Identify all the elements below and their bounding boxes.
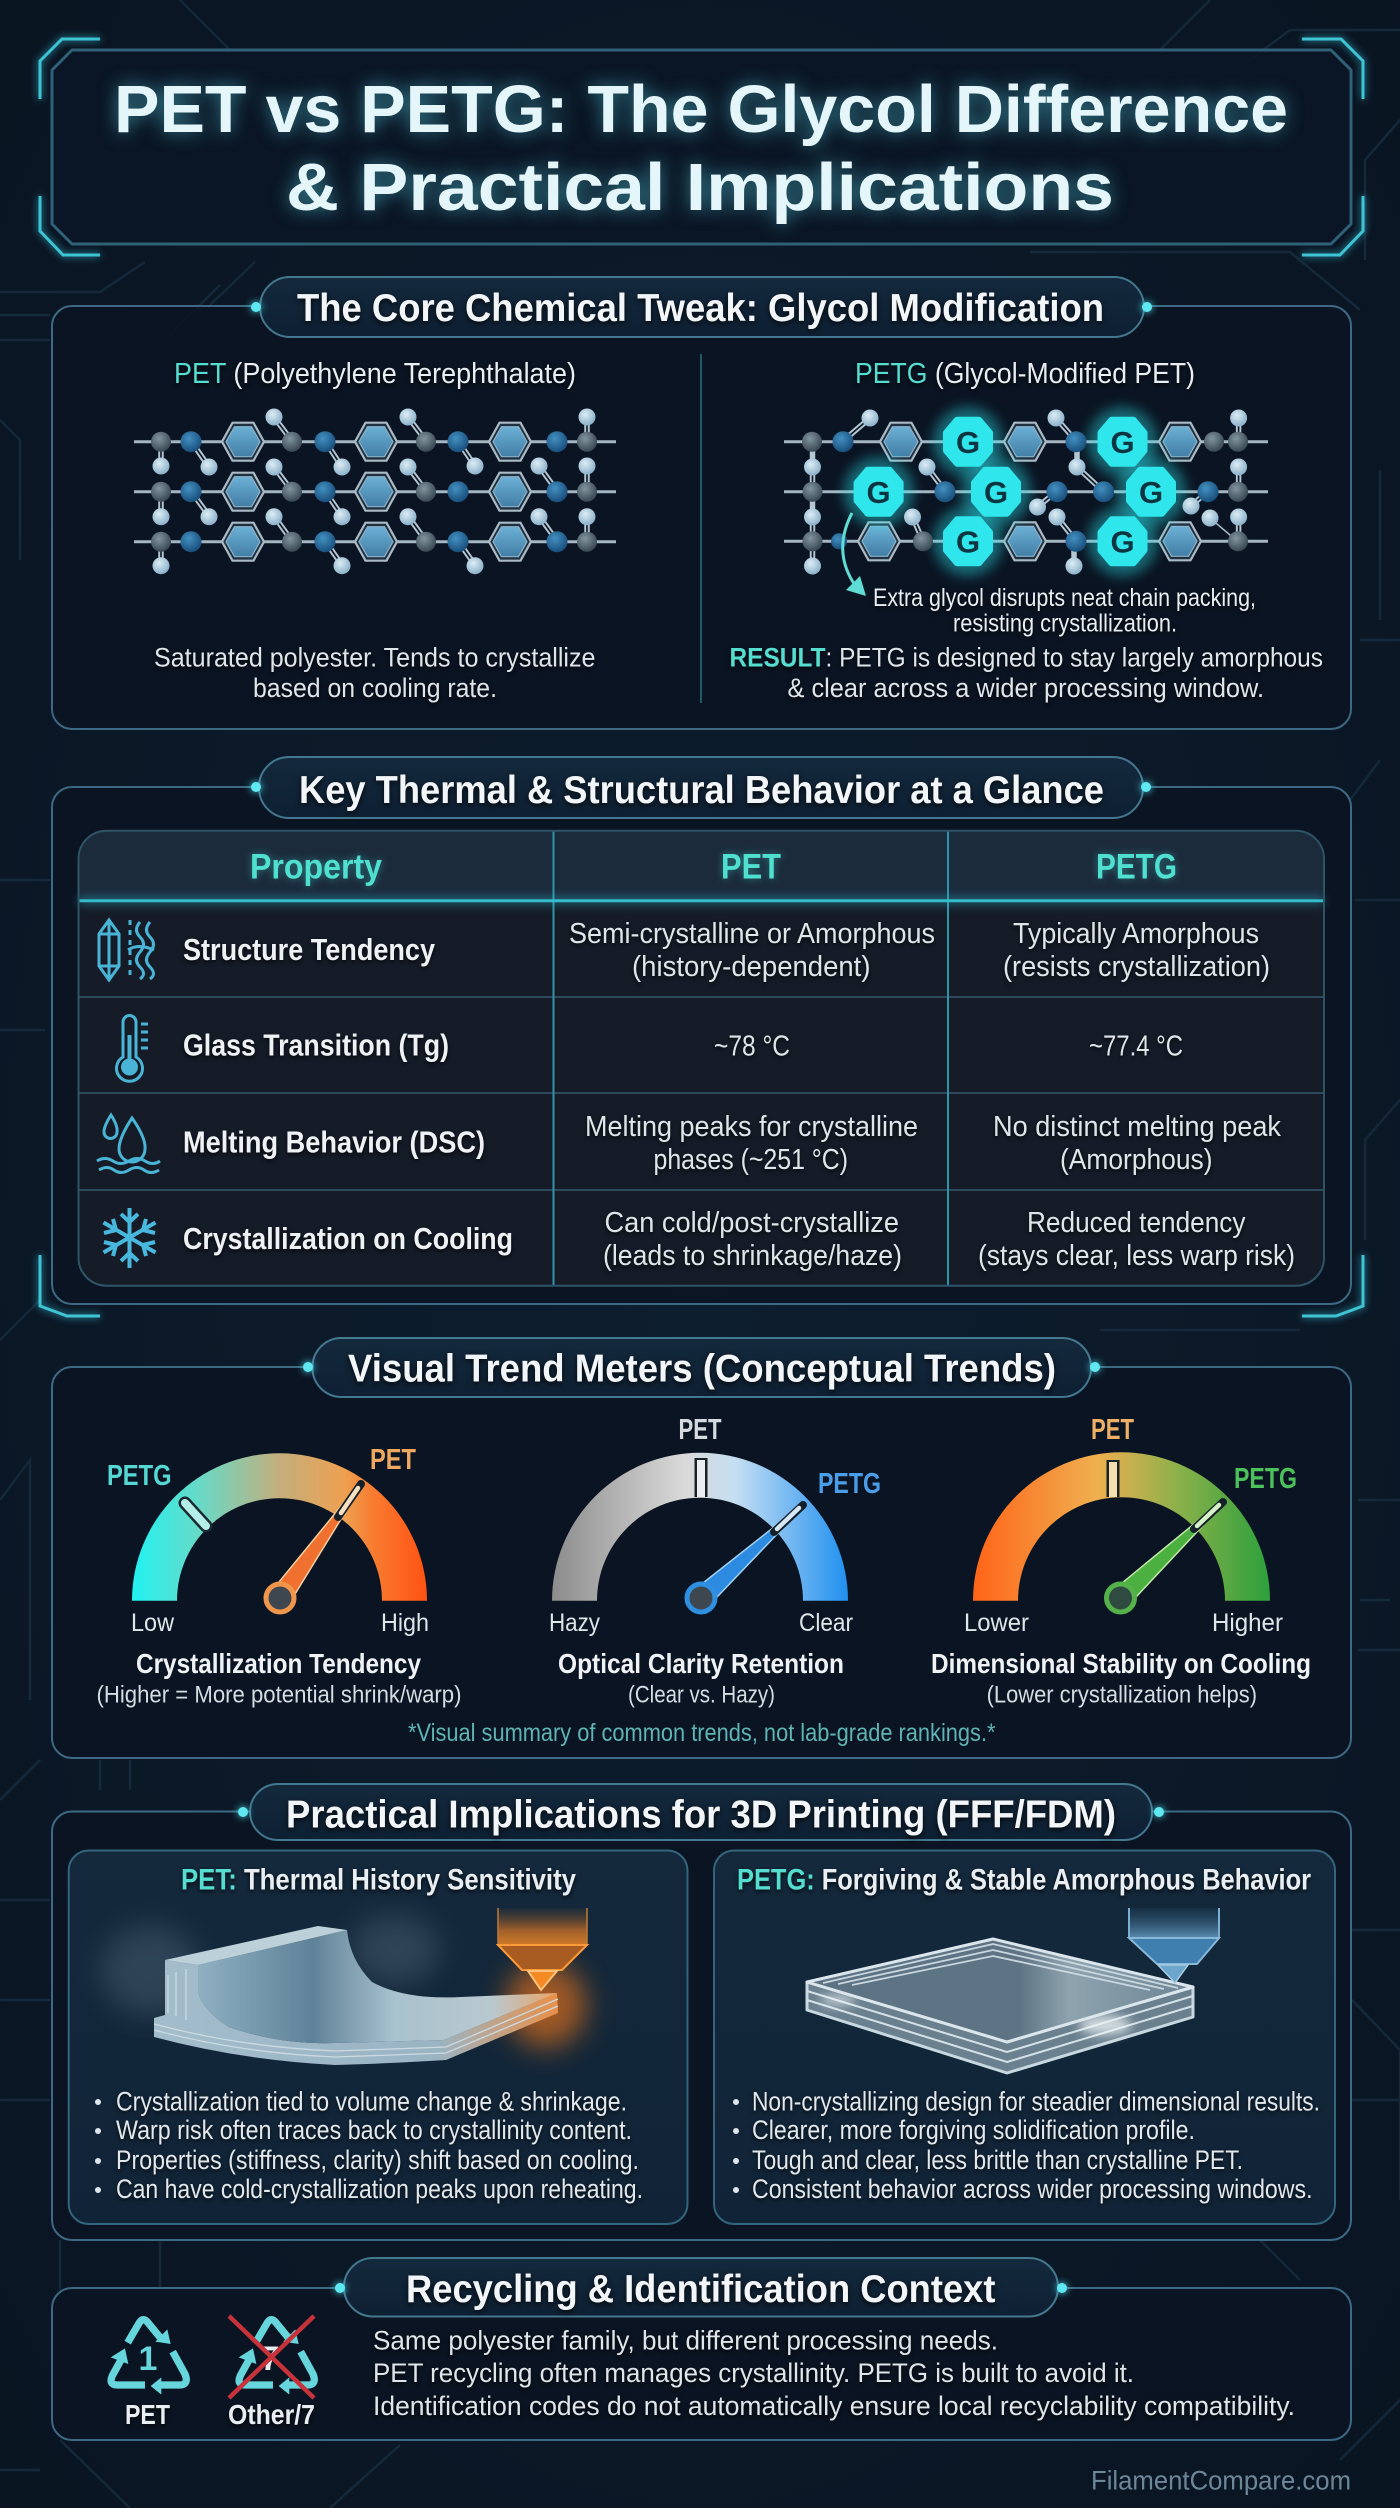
molecule diagram: PETG chains with glycol units: G: [956, 525, 980, 560]
molecule diagram: PETG chains with glycol units: G: [956, 425, 980, 460]
gauge: dimensional stability on cooling: Dimensional Stability on Cooling: [931, 1648, 1311, 1679]
gauge: optical clarity retention: [549, 1414, 881, 1709]
icon: recycling code 1 PET: 1: [139, 2340, 157, 2378]
PETG structure value: Typically Amorphous: [1013, 918, 1259, 950]
heading pill: recycling: [335, 2258, 1067, 2316]
PET sub-panel frame: [69, 1850, 687, 2224]
trend panel frame: [52, 1367, 1351, 1758]
row label: structure tendency: Structure Tendency: [183, 932, 436, 967]
arrow: glycol callout: [843, 513, 866, 596]
PET sub-panel heading: PET: Thermal History Sensitivity: [181, 1863, 576, 1896]
heading pill: trend meters: Visual Trend Meters (Conceptual Trends): [348, 1348, 1056, 1391]
molecule diagram: PETG chains with glycol units: G: [867, 475, 891, 510]
PET structure value: Semi-crystalline or Amorphous: [569, 918, 935, 950]
gauge: crystallization tendency: (Higher = More potential shrink/warp): [96, 1682, 462, 1709]
PETG bullet list: Clearer, more forgiving solidification profile.: [752, 2115, 1195, 2145]
gauge: dimensional stability on cooling: (Lower crystallization helps): [987, 1682, 1257, 1709]
title line 1: PET vs PETG: The Glycol Difference: [114, 72, 1288, 147]
icon: melting drop: [97, 1115, 160, 1172]
molecule diagram: PETG chains with glycol units: G: [1110, 425, 1135, 460]
core panel frame: [52, 306, 1351, 729]
icon: recycling code 7 crossed out: 7: [261, 2340, 279, 2378]
row label: crystallization on cooling: Crystallization on Cooling: [183, 1221, 513, 1256]
PETG melting value: [993, 1111, 1281, 1176]
sub-panel: PETG forgiving behavior: [714, 1850, 1335, 2224]
recycling panel frame: [52, 2288, 1351, 2440]
heading pill: practical implications: Practical Implications for 3D Printing (FFF/FDM): [286, 1794, 1116, 1836]
PETG Tg value: ~77.4 °C: [1089, 1031, 1183, 1063]
icon: recycling code 1 PET: [111, 2320, 186, 2430]
PET description: [154, 642, 596, 703]
callout text: glycol effect: Extra glycol disrupts neat chain packing,: [873, 584, 1256, 612]
gauge: crystallization tendency: Crystallization Tendency: [136, 1648, 421, 1679]
PETG bullet list: [733, 2086, 1320, 2204]
PET bullet list: Can have cold-crystallization peaks upon reheating.: [116, 2174, 643, 2204]
gauge: optical clarity retention: Hazy: [549, 1609, 600, 1637]
PETG structure value: [1003, 918, 1270, 983]
gauge: crystallization tendency: [96, 1444, 462, 1709]
recycling context text: PET recycling often manages crystallinity. PETG is built to avoid it.: [373, 2358, 1134, 2388]
PETG marker: [185, 1503, 206, 1526]
gauge: crystallization tendency: High: [381, 1609, 429, 1637]
PETG result text: RESULT: PETG is designed to stay largely amorphous: [730, 642, 1323, 672]
icon: snowflake: [104, 1208, 156, 1268]
PETG bullet list: Consistent behavior across wider processing windows.: [752, 2174, 1312, 2204]
callout text: glycol effect: resisting crystallization.: [953, 610, 1177, 638]
table body: [78, 831, 1324, 1286]
molecule diagram: PETG chains with glycol units: G: [1139, 475, 1163, 510]
title panel frame: [52, 50, 1351, 244]
recycling context text: Same polyester family, but different processing needs.: [373, 2326, 998, 2356]
heading pill: trend meters: [303, 1338, 1100, 1397]
comparison table: [78, 831, 1324, 1286]
lower corner brackets: [40, 1255, 1363, 1316]
PETG sub-panel frame: [714, 1850, 1335, 2224]
molecule diagram: PET chains: [134, 408, 616, 574]
needle: [1122, 1501, 1224, 1597]
illustration: warping PET part with hot nozzle: [100, 1908, 587, 2065]
PET subheading: PET (Polyethylene Terephthalate): [174, 358, 576, 390]
callout text: glycol effect: [873, 584, 1256, 638]
gauge: dimensional stability on cooling: PET: [1091, 1414, 1134, 1446]
PETG result text: [730, 642, 1323, 703]
PETG melting value: (Amorphous): [1060, 1144, 1212, 1176]
PET melting value: Melting peaks for crystalline: [585, 1111, 918, 1143]
gauge: optical clarity retention: Optical Clarity Retention: [558, 1648, 844, 1679]
PET bullet list: [95, 2086, 643, 2204]
row label: melting behavior: Melting Behavior (DSC): [183, 1124, 485, 1160]
PET bullet list: Warp risk often traces back to crystallinity content.: [116, 2115, 632, 2145]
PET description: Saturated polyester. Tends to crystallize: [154, 642, 596, 672]
PET structure value: (history-dependent): [632, 951, 870, 983]
title banner: [40, 39, 1363, 255]
molecule diagram: PETG chains with glycol units: [784, 407, 1268, 576]
title corner brackets: [40, 39, 1363, 255]
heading pill: core chemical tweak: The Core Chemical Tweak: Glycol Modification: [297, 287, 1104, 330]
heading pill: thermal behavior: [251, 757, 1151, 818]
PET melting value: phases (~251 °C): [654, 1144, 848, 1176]
PETG cooling value: (stays clear, less warp risk): [978, 1240, 1295, 1272]
gauge: crystallization tendency: PET: [370, 1444, 416, 1476]
needle: [703, 1505, 804, 1597]
table header row background: [78, 831, 1324, 901]
heading pill: recycling: Recycling & Identification Context: [406, 2268, 996, 2311]
nozzle: [498, 1908, 587, 1945]
gauge: dimensional stability on cooling: PETG: [1234, 1463, 1297, 1495]
PET melting value: [585, 1111, 918, 1176]
recycling context text: Identification codes do not automatically ensure local recyclability compatibility.: [373, 2391, 1295, 2421]
icon: recycling code 1 PET: PET: [125, 2399, 170, 2430]
plate side layers: [807, 1982, 1193, 2073]
needle: [279, 1483, 362, 1594]
illustration: flat clear PETG plate with nozzle: [807, 1908, 1219, 2073]
gauge: crystallization tendency: PETG: [107, 1460, 172, 1492]
part side layers: [154, 1960, 558, 2065]
molecule diagram: PETG chains with glycol units: G: [1110, 525, 1135, 560]
PET bullet list: Properties (stiffness, clarity) shift based on cooling.: [116, 2145, 639, 2175]
PETG sub-panel heading: PETG: Forgiving & Stable Amorphous Behavior: [737, 1863, 1311, 1896]
header: Property: Property: [250, 848, 382, 886]
header: PETG: PETG: [1096, 848, 1177, 886]
panel: core chemical tweak: [52, 277, 1351, 729]
plate top surface: [807, 1939, 1193, 2042]
header: PET: PET: [721, 848, 781, 886]
icon: thermometer: [116, 1016, 148, 1081]
PET cooling value: [603, 1207, 902, 1272]
PETG structure value: (resists crystallization): [1003, 951, 1270, 983]
gauge: optical clarity retention: PETG: [818, 1468, 881, 1500]
row label: glass transition: Glass Transition (Tg): [183, 1028, 449, 1063]
part wall top: [165, 1926, 347, 1965]
source credit: FilamentCompare.com: [1091, 2466, 1351, 2496]
PET description: based on cooling rate.: [253, 673, 497, 703]
gauge: dimensional stability on cooling: Lower: [964, 1609, 1029, 1637]
gauge: dimensional stability on cooling: [931, 1414, 1311, 1709]
panel: key thermal and structural behavior: [40, 757, 1363, 1316]
PET Tg value: ~78 °C: [714, 1031, 790, 1063]
practical panel frame: [52, 1812, 1351, 2240]
PETG result text: & clear across a wider processing window.: [788, 673, 1264, 703]
molecule diagram: PETG chains with glycol units: G: [984, 475, 1008, 510]
PETG melting value: No distinct melting peak: [993, 1111, 1281, 1143]
icon: recycling code 7 crossed out: Other/7: [228, 2399, 315, 2430]
PET cooling value: (leads to shrinkage/haze): [603, 1240, 902, 1272]
PETG cooling value: [978, 1207, 1295, 1272]
gauge: dimensional stability on cooling: Higher: [1212, 1609, 1283, 1637]
part concave surface: [198, 1930, 557, 2043]
gauge: optical clarity retention: Clear: [799, 1609, 853, 1637]
heading pill: core chemical tweak: [251, 277, 1152, 337]
PETG cooling value: Reduced tendency: [1027, 1207, 1246, 1239]
panel: recycling and identification: [52, 2258, 1351, 2440]
PETG subheading: PETG (Glycol-Modified PET): [855, 358, 1195, 390]
title line 2: & Practical Implications: [286, 150, 1114, 225]
gauge: optical clarity retention: (Clear vs. Hazy): [628, 1682, 775, 1709]
panel: practical implications for 3D printing: [52, 1784, 1351, 2240]
PET marker: [1106, 1460, 1120, 1497]
footnote: *Visual summary of common trends, not lab-grade rankings.*: [408, 1719, 996, 1747]
gauge: optical clarity retention: PET: [678, 1414, 722, 1446]
centre divider: [700, 354, 702, 703]
sub-panel: PET thermal history: [69, 1850, 687, 2224]
plate nozzle: [1129, 1908, 1219, 1938]
panel: visual trend meters: [52, 1338, 1351, 1758]
icon: crystal and amorphous structure: [99, 920, 154, 980]
icon: recycling code 7 crossed out: [228, 2316, 315, 2430]
PET structure value: [569, 918, 935, 983]
recycling context text: [373, 2326, 1295, 2421]
heading pill: thermal behavior: Key Thermal & Structural Behavior at a Glance: [299, 769, 1104, 812]
PET bullet list: Crystallization tied to volume change & shrinkage.: [116, 2086, 627, 2116]
PET cooling value: Can cold/post-crystallize: [604, 1207, 899, 1239]
PETG bullet list: Tough and clear, less brittle than crystalline PET.: [752, 2145, 1243, 2175]
gauge: crystallization tendency: Low: [131, 1609, 175, 1637]
PET marker: [694, 1458, 708, 1497]
thermal panel frame: [52, 787, 1351, 1304]
